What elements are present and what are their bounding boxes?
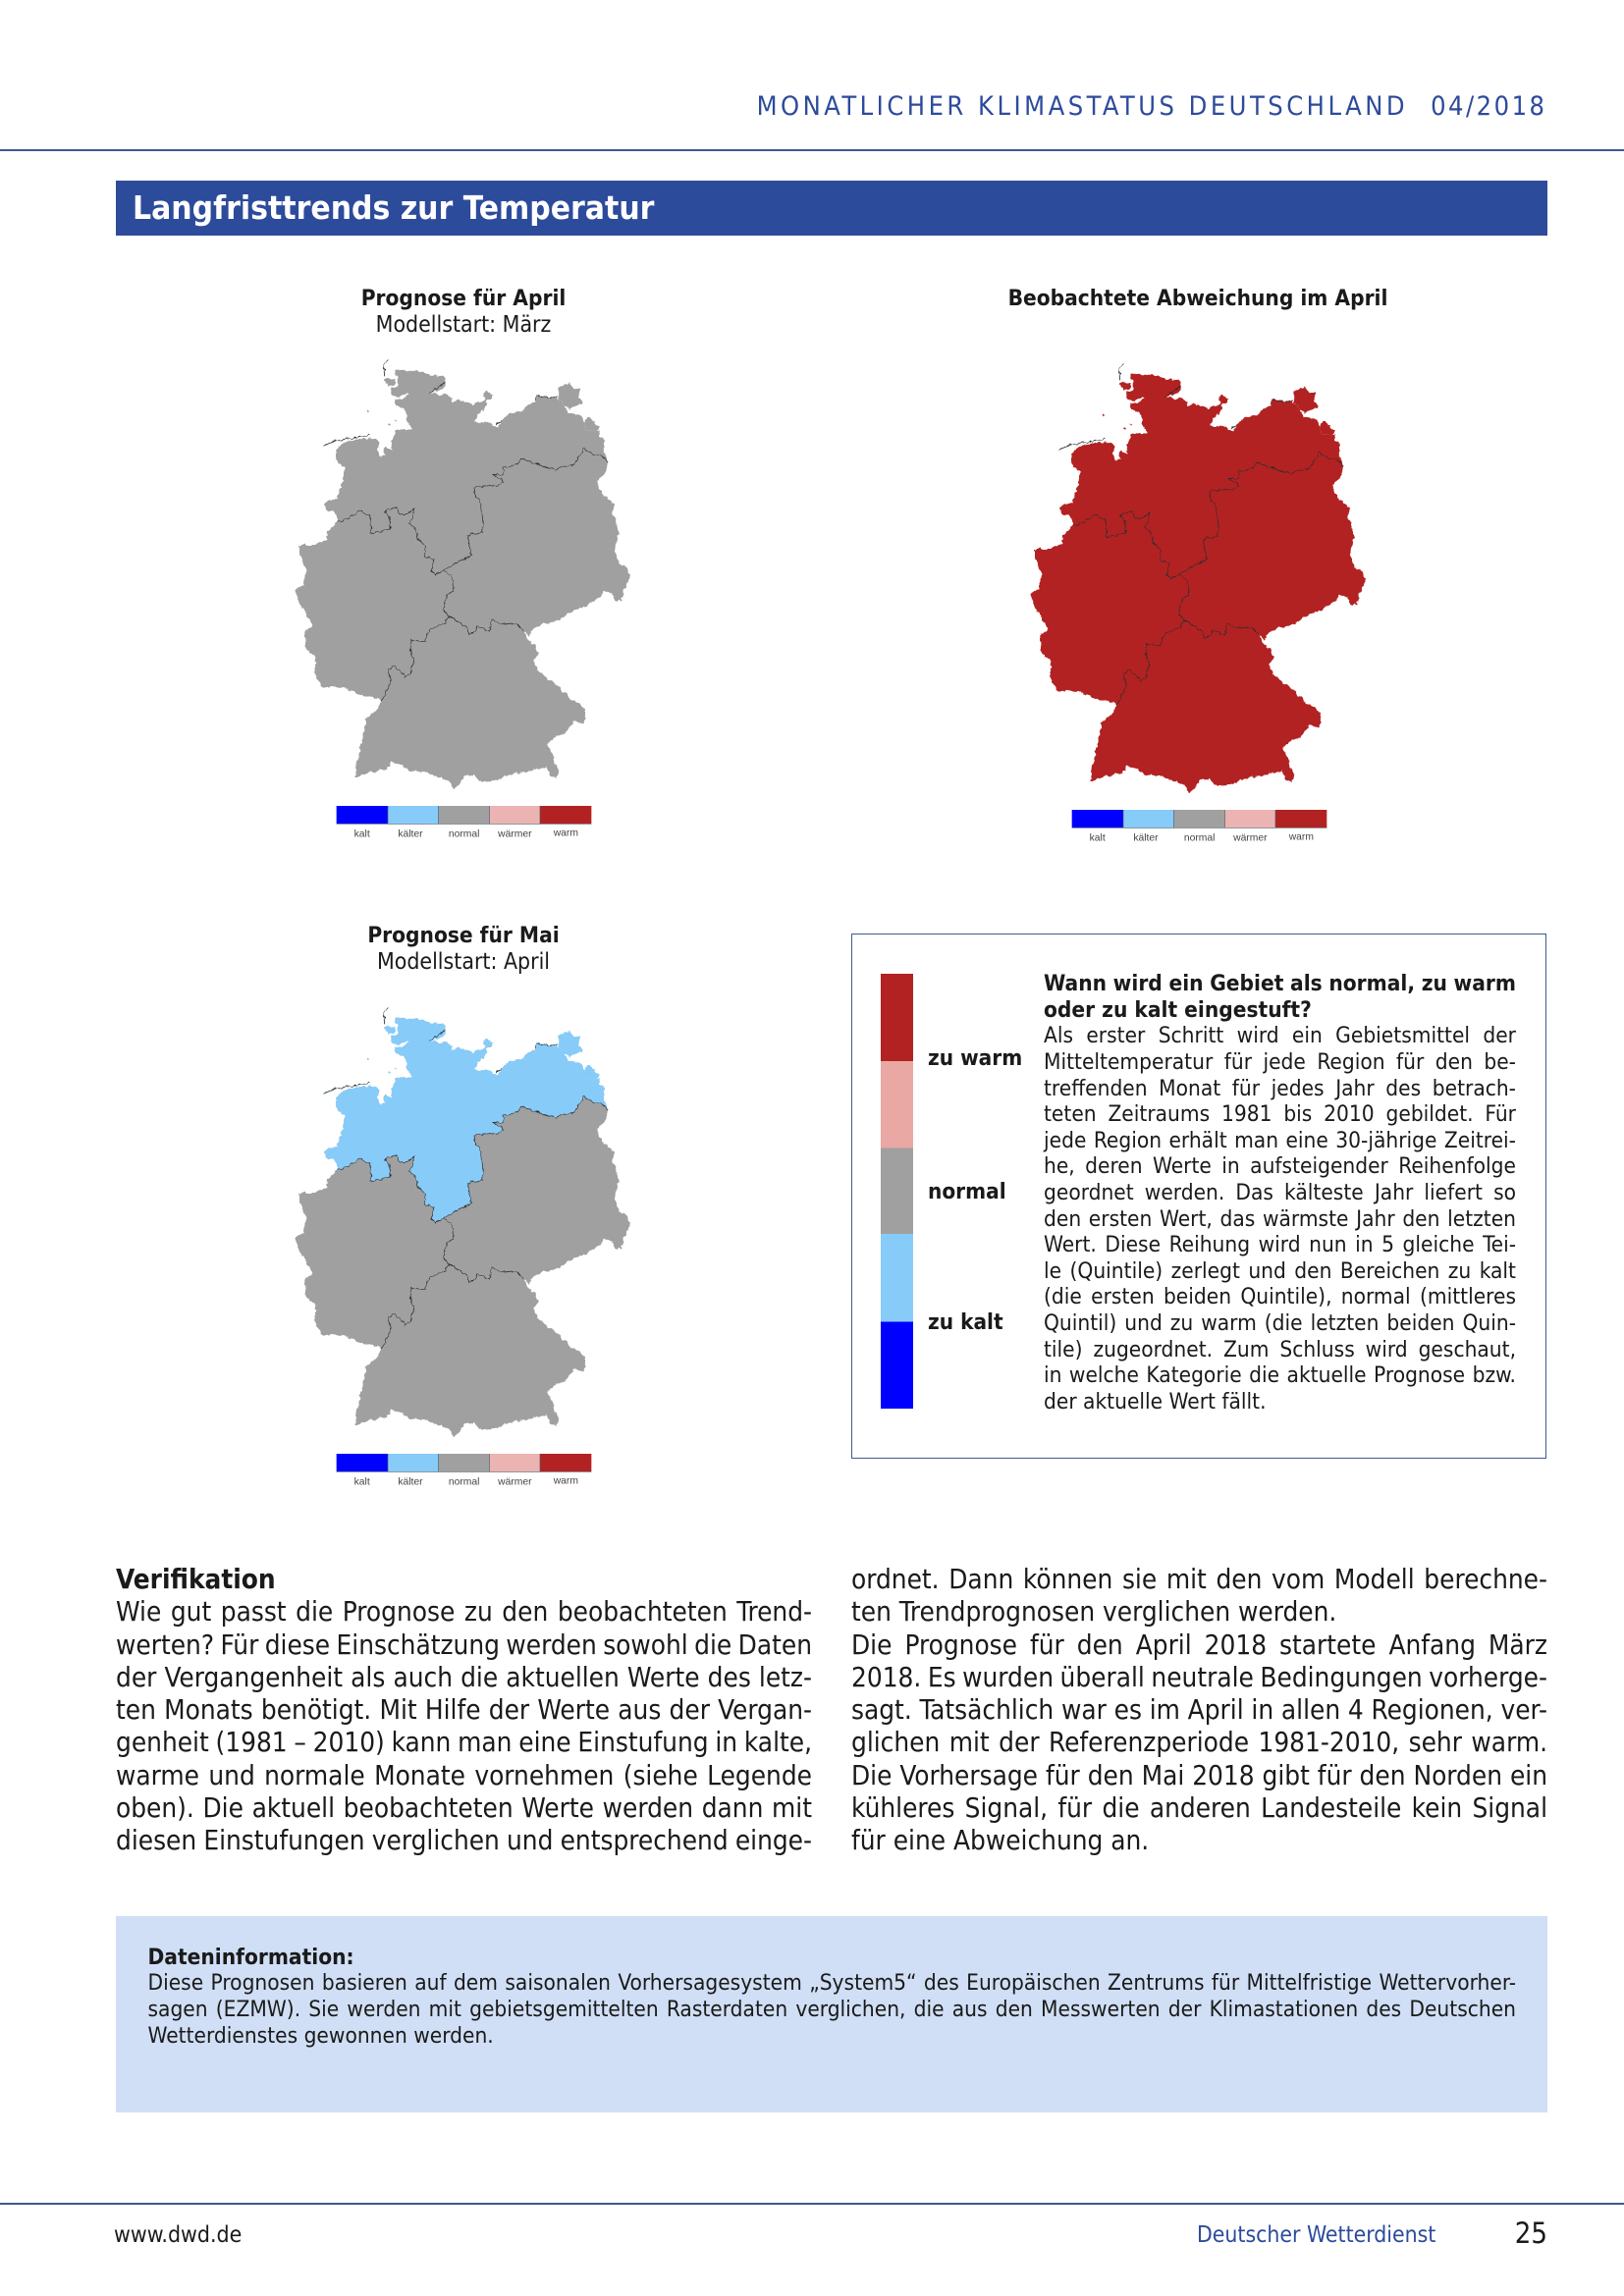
- text block: Verifikation left column: Verifikation: [116, 1563, 276, 1595]
- explanation text: geordnet werden. Das kälteste Jahr liefert so: [1044, 1180, 1516, 1205]
- legend: [337, 1454, 591, 1488]
- panel: data information: [116, 1916, 1547, 2112]
- text block: Verifikation right column: 2018. Es wurden überall neutrale Bedingungen vorherge-: [851, 1661, 1547, 1693]
- data information text: Diese Prognosen basieren auf dem saisonalen Vorhersagesystem „System5“ des Europäischen Zentrums für Mittelfristige Wettervorher-: [147, 1970, 1516, 1996]
- text block: Verifikation left column: genheit (1981 – 2010) kann man eine Einstufung in kalte,: [116, 1726, 812, 1758]
- scale label: zu kalt: zu kalt: [928, 1309, 1003, 1335]
- panel heading: Beobachtete Abweichung im April: Beobachtete Abweichung im April: [1008, 286, 1387, 311]
- legend: wärmer: [497, 829, 532, 840]
- footer: page number: 25: [1515, 2216, 1547, 2250]
- panel heading: Prognose für Mai: [367, 923, 560, 975]
- legend: warm: [1287, 832, 1313, 843]
- text block: Verifikation right column: sagt. Tatsächlich war es im April in allen 4 Regionen, ver-: [851, 1693, 1547, 1726]
- text block: Verifikation left column: ten Monats benötigt. Mit Hilfe der Werte aus der Vergan-: [116, 1693, 812, 1726]
- explanation text: Mitteltemperatur für jede Region für den be-: [1044, 1049, 1516, 1075]
- text block: Verifikation right column: Die Prognose für den April 2018 startete Anfang März: [851, 1629, 1547, 1661]
- explanation text: Wann wird ein Gebiet als normal, zu warm: [1044, 971, 1516, 996]
- panel: classification explanation: [851, 934, 1546, 1459]
- explanation text: den ersten Wert, das wärmste Jahr den letzten: [1044, 1206, 1516, 1232]
- legend: normal: [449, 829, 479, 840]
- colour scale bar: [881, 974, 913, 1408]
- explanation text: tile) zugeordnet. Zum Schluss wird geschaut,: [1044, 1337, 1516, 1362]
- scale label: zu warm: zu warm: [928, 1045, 1022, 1071]
- footer: publisher: Deutscher Wetterdienst: [1197, 2222, 1435, 2248]
- panel: forecast map May: [295, 1007, 630, 1488]
- data information text: Wetterdienstes gewonnen werden.: [147, 2023, 494, 2049]
- legend: kalt: [354, 829, 370, 840]
- panel heading: Prognose für April: [361, 286, 566, 338]
- explanation text: in welche Kategorie die aktuelle Prognose bzw.: [1044, 1362, 1516, 1388]
- panel: observed anomaly map April: [1031, 363, 1367, 844]
- text block: Verifikation left column: diesen Einstufungen verglichen und entsprechend einge-: [116, 1824, 812, 1856]
- explanation text: [1043, 971, 1516, 1415]
- text block: Verifikation right column: [851, 1563, 1547, 1856]
- explanation text: Quintil) und zu warm (die letzten beiden Quin-: [1044, 1310, 1516, 1336]
- panel heading: Prognose für Mai: Prognose für Mai: [367, 923, 560, 948]
- text block: Verifikation right column: ten Trendprognosen verglichen werden.: [851, 1595, 1336, 1628]
- text block: Verifikation left column: oben). Die aktuell beobachteten Werte werden dann mit: [116, 1791, 812, 1824]
- legend: wärmer: [1232, 833, 1268, 844]
- legend: kälter: [398, 829, 423, 840]
- text block: Verifikation left column: warme und normale Monate vornehmen (siehe Legende: [116, 1759, 812, 1791]
- map of Germany, all regions normal: [296, 359, 630, 788]
- explanation text: (die ersten beiden Quintile), normal (mittleres: [1044, 1284, 1516, 1309]
- panel heading: Prognose für Mai: Modellstart: April: [377, 949, 550, 975]
- explanation text: der aktuelle Wert fällt.: [1044, 1389, 1267, 1415]
- explanation text: Als erster Schritt wird ein Gebietsmittel der: [1044, 1023, 1516, 1048]
- explanation text: teten Zeitraums 1981 bis 2010 gebildet. Für: [1044, 1101, 1516, 1127]
- text block: Verifikation left column: der Vergangenheit als auch die aktuellen Werte des letz-: [116, 1661, 812, 1693]
- legend: warm: [553, 1476, 578, 1487]
- panel heading: Prognose für April: Prognose für April: [361, 286, 566, 311]
- legend: [337, 806, 591, 840]
- explanation text: he, deren Werte in aufsteigender Reihenfolge: [1044, 1153, 1516, 1179]
- data information text: Dateninformation:: [147, 1945, 354, 1970]
- explanation text: jede Region erhält man eine 30-jährige Zeitrei-: [1044, 1128, 1516, 1153]
- scale label: normal: normal: [928, 1178, 1006, 1203]
- legend: wärmer: [497, 1477, 532, 1488]
- explanation text: le (Quintile) zerlegt und den Bereichen zu kalt: [1044, 1258, 1516, 1284]
- map of Germany, north region cooler: [296, 1007, 630, 1436]
- text block: Verifikation right column: glichen mit der Referenzperiode 1981-2010, sehr warm.: [851, 1726, 1547, 1758]
- page header text: MONATLICHER KLIMASTATUS DEUTSCHLAND 04/2018: [757, 91, 1547, 122]
- text block: Verifikation left column: [116, 1563, 812, 1856]
- data information text: sagen (EZMW). Sie werden mit gebietsgemittelten Rasterdaten verglichen, die aus den Messwerten der Klimastationen des Deutschen: [147, 1997, 1516, 2022]
- text block: Verifikation right column: für eine Abweichung an.: [851, 1824, 1149, 1856]
- legend: kälter: [398, 1477, 423, 1488]
- legend: kälter: [1133, 833, 1159, 844]
- text block: Verifikation left column: werten? Für diese Einschätzung werden sowohl die Daten: [116, 1629, 812, 1661]
- explanation text: oder zu kalt eingestuft?: [1044, 997, 1312, 1023]
- section title bar: Langfristtrends zur Temperatur: [133, 188, 654, 227]
- explanation text: treffenden Monat für jedes Jahr des betrach-: [1044, 1076, 1516, 1101]
- data information text: [147, 1945, 1516, 2049]
- panel: forecast map April: [295, 359, 630, 840]
- text block: Verifikation right column: Die Vorhersage für den Mai 2018 gibt für den Norden ein: [851, 1759, 1547, 1791]
- legend: warm: [553, 828, 578, 839]
- section title bar: [116, 181, 1547, 236]
- footer: website: www.dwd.de: [114, 2222, 242, 2248]
- explanation text: Wert. Diese Reihung wird nun in 5 gleiche Tei-: [1044, 1232, 1516, 1257]
- text block: Verifikation right column: kühleres Signal, für die anderen Landesteile kein Signal: [851, 1791, 1547, 1824]
- legend: kalt: [354, 1477, 370, 1488]
- legend: normal: [449, 1477, 479, 1488]
- text block: Verifikation left column: Wie gut passt die Prognose zu den beobachteten Trend-: [116, 1595, 812, 1628]
- legend: normal: [1183, 833, 1215, 844]
- text block: Verifikation right column: ordnet. Dann können sie mit den vom Modell berechne-: [851, 1563, 1547, 1595]
- legend: [1071, 810, 1326, 844]
- panel heading: Prognose für April: Modellstart: März: [376, 312, 551, 338]
- legend: kalt: [1089, 833, 1105, 844]
- map of Germany, all regions warm: [1031, 363, 1365, 792]
